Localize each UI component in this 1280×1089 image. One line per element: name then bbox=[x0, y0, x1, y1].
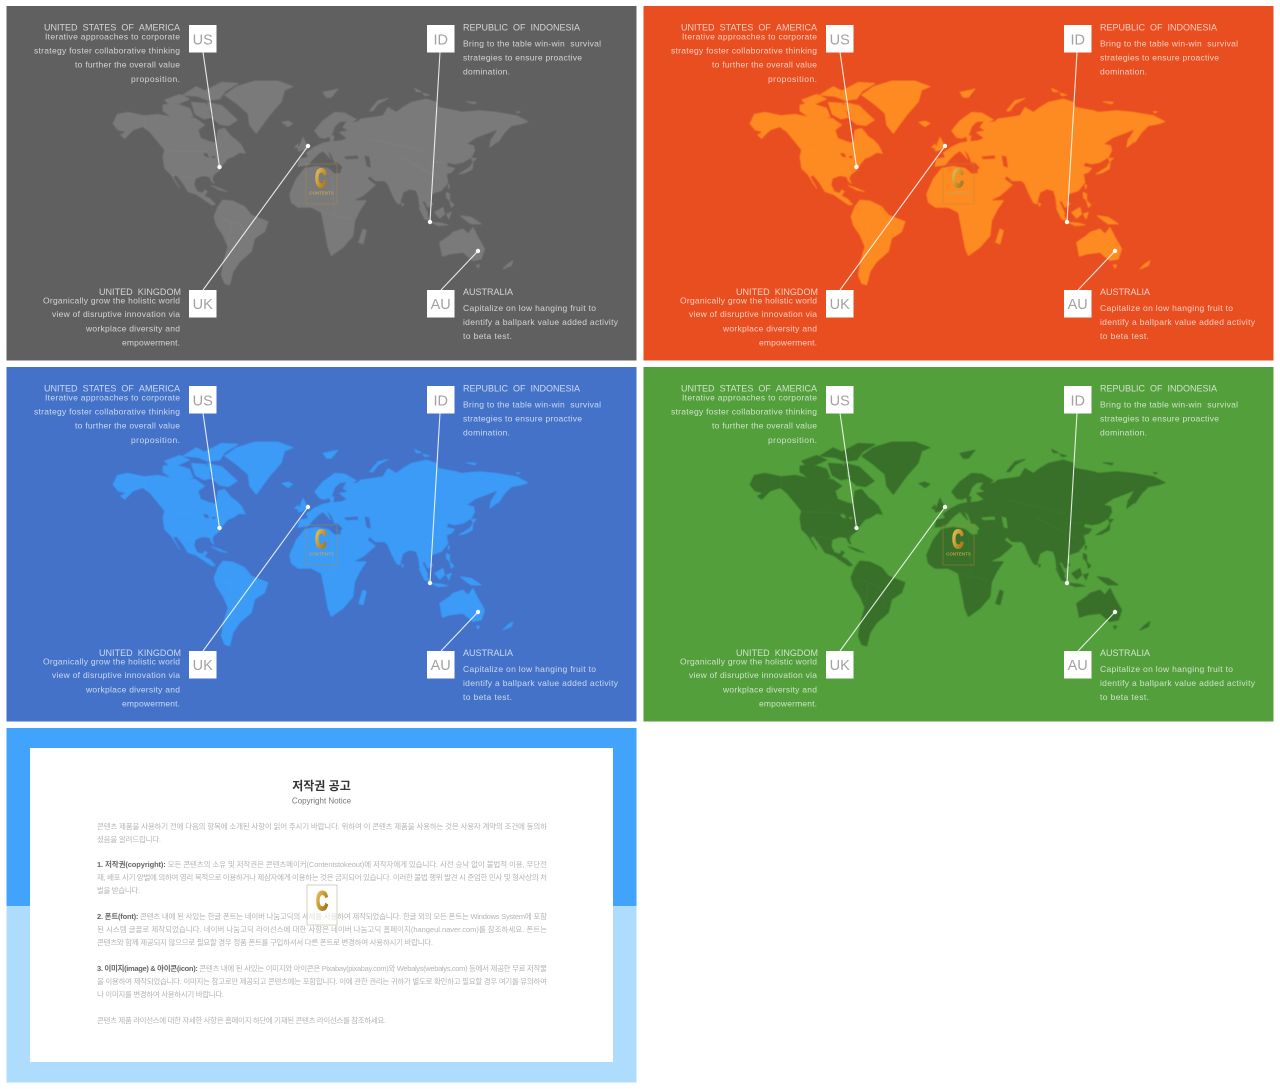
text: United States: proposition. bbox=[768, 435, 817, 445]
label box: ID: ID bbox=[1070, 394, 1085, 410]
panel: blue map slide bbox=[6, 367, 636, 722]
label box: AU: AU bbox=[1068, 297, 1088, 313]
text: United Kingdom bbox=[680, 287, 818, 347]
watermark logo bbox=[306, 524, 337, 565]
text: United Kingdom: view of disruptive innovation via bbox=[689, 670, 817, 680]
label box: AU bbox=[427, 651, 454, 678]
label box: UK bbox=[826, 651, 854, 678]
text: United Kingdom: workplace diversity and bbox=[85, 684, 180, 694]
panel: gray map slide bbox=[6, 6, 636, 360]
label box: ID bbox=[427, 386, 454, 414]
text: United States bbox=[34, 383, 180, 445]
text: Australia: AUSTRALIA bbox=[463, 648, 513, 658]
text: United Kingdom: view of disruptive innovation via bbox=[52, 309, 180, 319]
text: United States: to further the overall value bbox=[75, 59, 180, 69]
label box: US: US bbox=[193, 394, 213, 410]
text: United States: strategy foster collaborative thinking bbox=[671, 406, 817, 416]
text: United Kingdom: Organically grow the holistic world bbox=[680, 295, 817, 305]
label box: US: US bbox=[830, 32, 850, 48]
label box: US bbox=[826, 386, 854, 414]
text: United States: to further the overall value bbox=[75, 420, 180, 430]
label box: US bbox=[826, 25, 854, 52]
text: Indonesia bbox=[463, 22, 601, 76]
text: United States: proposition. bbox=[131, 74, 180, 84]
label box: AU: AU bbox=[1068, 658, 1088, 674]
text: Indonesia: strategies to ensure proactive bbox=[1100, 413, 1219, 423]
text: United States: to further the overall value bbox=[712, 420, 817, 430]
text: United States: UNITED STATES OF AMERICA bbox=[681, 22, 817, 32]
text: United States: Iterative approaches to corporate bbox=[45, 392, 180, 402]
text: United Kingdom: empowerment. bbox=[759, 337, 817, 347]
text: United States bbox=[34, 22, 180, 84]
world map bbox=[750, 81, 1165, 285]
text: Australia bbox=[463, 648, 619, 702]
pointer lines bbox=[203, 413, 478, 651]
notice item 2: 2. 폰트(font): 콘텐츠 내에 된 사있는 한글 폰트는 네이버 나눔고딕의 서체를 사용하여 제작되었습니다. 한글 외의 모든 폰트는 Windows System에 포함 bbox=[97, 911, 547, 921]
text: United Kingdom: view of disruptive innovation via bbox=[689, 309, 817, 319]
label box: ID: ID bbox=[1070, 32, 1085, 48]
notice item 3: 을 이용하여 제작되었습니다. 이미지는 참고로만 제공되고 콘텐츠에는 포함합니다. 이에 관한 권리는 귀하가 별도로 확인하고 필요할 경우 여기를 유의하여 bbox=[97, 976, 547, 986]
text: United States: UNITED STATES OF AMERICA bbox=[681, 383, 817, 393]
text: Indonesia: Bring to the table win-win survival bbox=[1100, 38, 1238, 48]
text: Australia: AUSTRALIA bbox=[1100, 287, 1150, 297]
notice intro: 콘텐츠 제품을 사용하기 전에 다음의 항목에 소개된 사항이 읽어 주시기 바랍니다. 위하여 이 콘텐츠 제품을 사용하는 것은 사용자 계약의 조건에 동의하 bbox=[97, 821, 547, 831]
text: Australia: Capitalize on low hanging fruit to bbox=[463, 303, 596, 313]
text: Indonesia: domination. bbox=[1100, 427, 1147, 437]
text: Australia: AUSTRALIA bbox=[1100, 648, 1150, 658]
notice intro: 셨음을 알려드립니다. bbox=[97, 834, 161, 844]
notice item 2 bbox=[97, 911, 547, 947]
text: Indonesia: Bring to the table win-win survival bbox=[1100, 399, 1238, 409]
label box: UK: UK bbox=[830, 297, 850, 313]
text: Australia bbox=[1100, 287, 1256, 341]
panel: copyright notice bbox=[6, 728, 636, 1082]
pointer lines bbox=[840, 52, 1115, 290]
label box: UK: UK bbox=[830, 658, 850, 674]
text: Indonesia: Bring to the table win-win survival bbox=[463, 399, 601, 409]
label box: ID: ID bbox=[433, 32, 448, 48]
label box: AU bbox=[1064, 290, 1092, 318]
text: Australia: to beta test. bbox=[463, 331, 512, 341]
notice item 3: 나 이미지를 변경하여 사용하시기 바랍니다. bbox=[97, 989, 224, 999]
watermark logo bbox=[943, 524, 974, 565]
watermark logo bbox=[307, 885, 337, 925]
panel: orange map slide bbox=[644, 6, 1274, 360]
text: Australia: identify a ballpark value added activity bbox=[463, 317, 619, 327]
watermark logo: CONTENTS bbox=[309, 190, 334, 196]
text: United Kingdom: UNITED KINGDOM bbox=[736, 287, 818, 297]
notice item 1: 벌을 받습니다. bbox=[97, 885, 140, 895]
panel: green map slide bbox=[644, 367, 1274, 722]
text: United Kingdom bbox=[680, 648, 818, 708]
watermark logo: CONTENTS bbox=[946, 190, 971, 196]
text: Indonesia: REPUBLIC OF INDONESIA bbox=[1100, 383, 1217, 393]
watermark logo: C bbox=[952, 524, 964, 554]
watermark logo: C bbox=[315, 163, 327, 193]
text: United States bbox=[671, 22, 817, 84]
label box: AU: AU bbox=[431, 297, 451, 313]
label box: ID bbox=[1064, 386, 1092, 414]
text: United Kingdom: Organically grow the holistic world bbox=[43, 656, 180, 666]
label box: ID bbox=[427, 25, 454, 52]
text: Indonesia: domination. bbox=[463, 66, 510, 76]
label box: UK bbox=[189, 651, 216, 678]
text: Australia: AUSTRALIA bbox=[463, 287, 513, 297]
text: United Kingdom: UNITED KINGDOM bbox=[736, 648, 818, 658]
text: Indonesia: strategies to ensure proactive bbox=[463, 52, 582, 62]
text: United Kingdom: workplace diversity and bbox=[722, 684, 817, 694]
text: Indonesia: REPUBLIC OF INDONESIA bbox=[1100, 22, 1217, 32]
text: United Kingdom: empowerment. bbox=[759, 698, 817, 708]
world map bbox=[750, 442, 1165, 646]
text: Indonesia: domination. bbox=[1100, 66, 1147, 76]
text: United Kingdom: UNITED KINGDOM bbox=[99, 648, 181, 658]
notice item 1 bbox=[97, 859, 547, 895]
notice item 1: 1. 저작권(copyright): 모든 콘텐츠의 소유 및 저작권은 콘텐츠메이커(Contentstokeout)에 저작자에게 있습니다. 사전 승낙 없이 불법적 이용, 무단전 bbox=[97, 859, 547, 869]
watermark logo bbox=[306, 163, 337, 204]
text: United States: strategy foster collaborative thinking bbox=[34, 45, 180, 55]
text: Indonesia: Bring to the table win-win survival bbox=[463, 38, 601, 48]
text: United States: UNITED STATES OF AMERICA bbox=[44, 22, 180, 32]
label box: ID: ID bbox=[433, 394, 448, 410]
text: Indonesia: domination. bbox=[463, 427, 510, 437]
text: Indonesia: REPUBLIC OF INDONESIA bbox=[463, 22, 580, 32]
text: United States: Iterative approaches to corporate bbox=[682, 31, 817, 41]
text: Australia bbox=[463, 287, 619, 341]
text: Australia: Capitalize on low hanging fruit to bbox=[1100, 303, 1233, 313]
watermark logo: CONTENTS bbox=[946, 552, 971, 556]
text: Indonesia bbox=[1100, 383, 1238, 437]
text: United States: Iterative approaches to corporate bbox=[682, 392, 817, 402]
label box: ID bbox=[1064, 25, 1092, 52]
text: Australia: Capitalize on low hanging fruit to bbox=[1100, 664, 1233, 674]
label box: AU: AU bbox=[431, 658, 451, 674]
label box: US bbox=[189, 386, 216, 414]
watermark logo: C bbox=[952, 163, 964, 193]
watermark logo: CONTENTS bbox=[309, 552, 334, 556]
text: United Kingdom: workplace diversity and bbox=[722, 323, 817, 333]
notice footer: 콘텐츠 제품 라이선스에 대한 자세한 사항은 홈페이지 하단에 기재된 콘텐츠 라이선스를 참조하세요. bbox=[97, 1015, 386, 1025]
label box: US: US bbox=[830, 394, 850, 410]
pointer lines bbox=[203, 52, 478, 290]
text: Australia: identify a ballpark value added activity bbox=[463, 678, 619, 688]
text: United Kingdom bbox=[43, 287, 181, 347]
text: Australia: to beta test. bbox=[1100, 692, 1149, 702]
text: Australia: identify a ballpark value added activity bbox=[1100, 678, 1256, 688]
text: Indonesia: REPUBLIC OF INDONESIA bbox=[463, 383, 580, 393]
text: Australia bbox=[1100, 648, 1256, 702]
text: Indonesia: strategies to ensure proactive bbox=[463, 413, 582, 423]
text: United Kingdom: view of disruptive innovation via bbox=[52, 670, 180, 680]
text: United Kingdom: empowerment. bbox=[122, 337, 180, 347]
watermark logo bbox=[943, 163, 974, 204]
text: Australia: identify a ballpark value added activity bbox=[1100, 317, 1256, 327]
text: United States: to further the overall value bbox=[712, 59, 817, 69]
world map bbox=[113, 81, 528, 285]
text: Australia: Capitalize on low hanging fruit to bbox=[463, 664, 596, 674]
text: United States: strategy foster collaborative thinking bbox=[34, 406, 180, 416]
text: United States bbox=[671, 383, 817, 445]
label box: UK bbox=[189, 290, 216, 318]
text: Indonesia: strategies to ensure proactive bbox=[1100, 52, 1219, 62]
location dots bbox=[217, 144, 480, 253]
location dots bbox=[217, 505, 480, 614]
text: United States: proposition. bbox=[131, 435, 180, 445]
watermark logo: C bbox=[315, 524, 327, 554]
watermark logo: C bbox=[316, 886, 328, 916]
text: United Kingdom bbox=[43, 648, 181, 708]
text: Indonesia bbox=[463, 383, 601, 437]
text: United States: proposition. bbox=[768, 74, 817, 84]
text: United Kingdom: Organically grow the holistic world bbox=[43, 295, 180, 305]
label box: UK: UK bbox=[193, 297, 213, 313]
label box: AU bbox=[427, 290, 454, 318]
text: Indonesia bbox=[1100, 22, 1238, 76]
text: United Kingdom: empowerment. bbox=[122, 698, 180, 708]
notice item 2: 된 시스템 글꼴로 제작되었습니다. 네이버 나눔고딕 라이선스에 대한 사항은 네이버 나눔고딕 홈페이지(hangeul.naver.com)를 참조하세요. 폰트는 bbox=[97, 924, 547, 934]
notice item 2: 콘텐츠와 함께 제공되지 않으므로 필요할 경우 정품 폰트를 구입하셔서 다른 폰트로 변경하여 사용하시기 바랍니다. bbox=[97, 937, 433, 947]
text: United Kingdom: workplace diversity and bbox=[85, 323, 180, 333]
notice intro bbox=[97, 821, 547, 844]
notice item 3 bbox=[97, 963, 547, 999]
text: Australia: to beta test. bbox=[463, 692, 512, 702]
location dots bbox=[854, 505, 1117, 614]
location dots bbox=[854, 144, 1117, 253]
label box: UK bbox=[826, 290, 854, 318]
label box: US: US bbox=[193, 32, 213, 48]
text: United States: strategy foster collaborative thinking bbox=[671, 45, 817, 55]
world map bbox=[113, 442, 528, 646]
pointer lines bbox=[840, 413, 1115, 651]
text: United Kingdom: Organically grow the holistic world bbox=[680, 656, 817, 666]
label box: US bbox=[189, 25, 216, 52]
text: United States: Iterative approaches to corporate bbox=[45, 31, 180, 41]
text: United States: UNITED STATES OF AMERICA bbox=[44, 383, 180, 393]
text: United Kingdom: UNITED KINGDOM bbox=[99, 287, 181, 297]
notice item 3: 3. 이미지(image) & 아이콘(icon): 콘텐츠 내에 된 사있는 이미지와 아이콘은 Pixabay(pixabay.com)와 Webalys(webalys.com) 등에서 제공한 무료 저작물 bbox=[97, 963, 547, 973]
notice heading: 저작권 공고 bbox=[292, 778, 351, 793]
label box: UK: UK bbox=[193, 658, 213, 674]
notice subtitle: Copyright Notice bbox=[292, 796, 352, 806]
label box: AU bbox=[1064, 651, 1092, 678]
notice item 1: 재, 배포 사기 양벌에 의하여 영리 목적으로 이용하거나 제삼자에게 이용하는 것은 금지되어 있습니다. 이러한 불법 행위 발견 시 준엄한 민사 및 형사상의 처 bbox=[97, 872, 547, 882]
text: Australia: to beta test. bbox=[1100, 331, 1149, 341]
